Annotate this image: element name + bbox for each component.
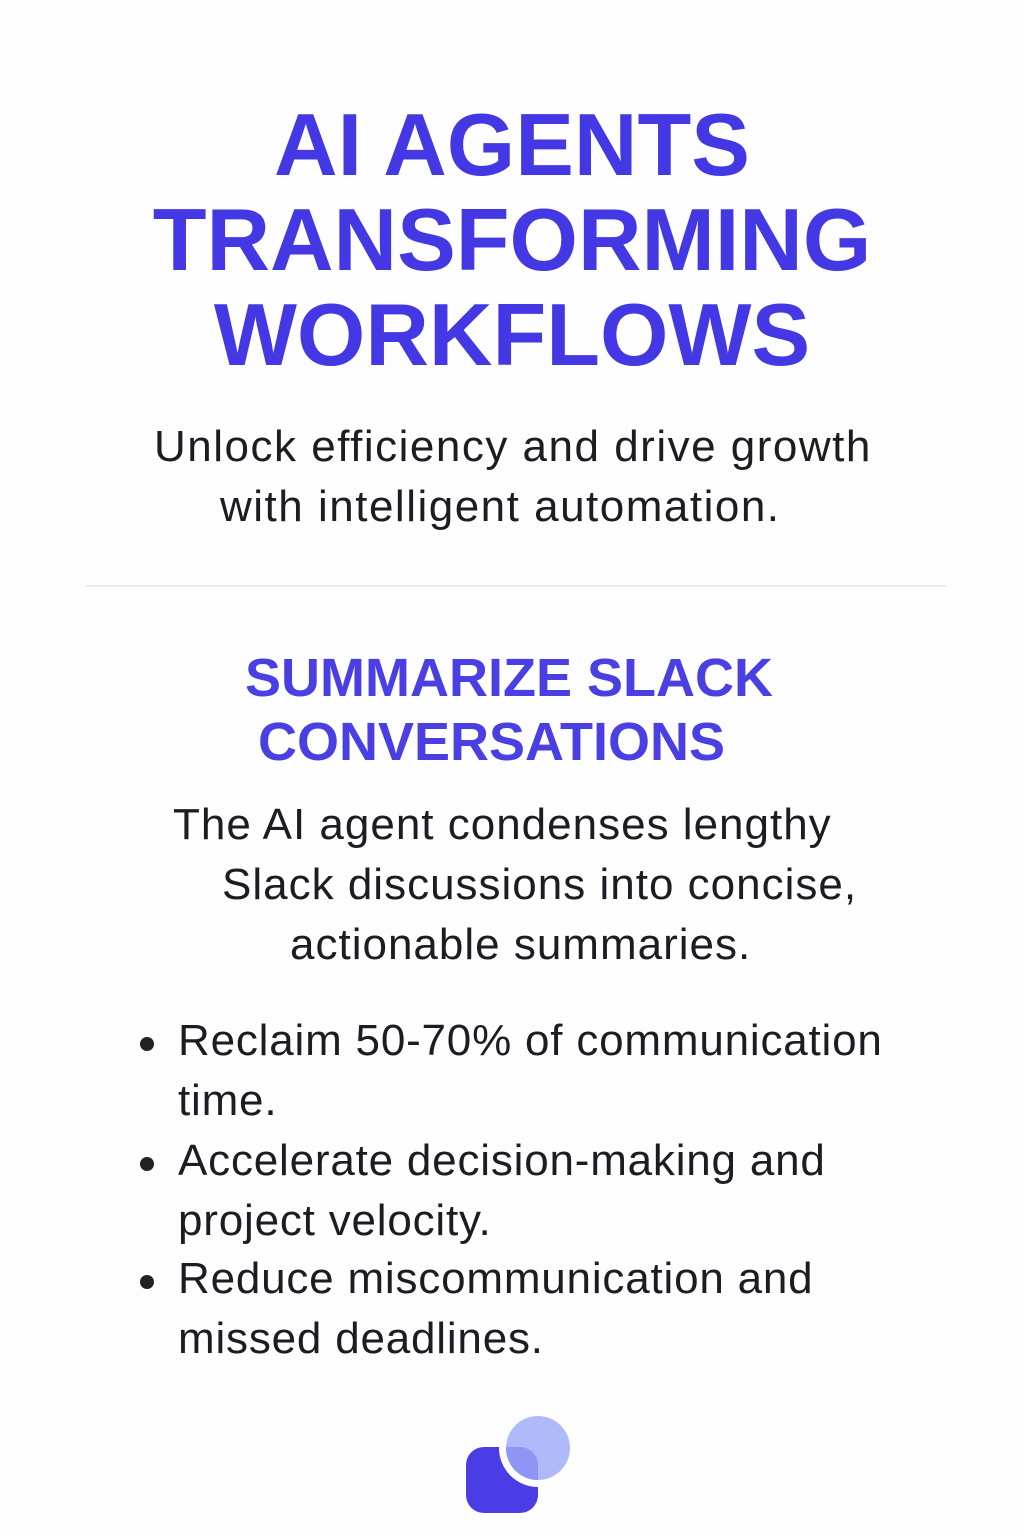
bullet 2: Accelerate decision-making and: [178, 1136, 826, 1185]
bullet 3: Reduce miscommunication and: [178, 1254, 813, 1303]
section heading: CONVERSATIONS: [258, 712, 725, 772]
title: TRANSFORMING: [153, 190, 871, 289]
bullet 2: project velocity.: [178, 1196, 492, 1245]
bullet 1: Reclaim 50-70% of communication: [178, 1016, 883, 1065]
description: The AI agent condenses lengthy: [173, 800, 832, 849]
bullet 1: time.: [178, 1076, 277, 1125]
section heading: SUMMARIZE SLACK: [245, 648, 773, 708]
bullet 3: [140, 1254, 813, 1363]
subtitle: [154, 422, 872, 531]
subtitle: Unlock efficiency and drive growth: [154, 422, 872, 471]
bullet 2: [140, 1136, 826, 1245]
bullet 1: [140, 1016, 883, 1125]
icon: logo: [466, 1416, 570, 1513]
subtitle: with intelligent automation.: [220, 482, 781, 531]
description: Slack discussions into concise,: [222, 860, 857, 909]
title: WORKFLOWS: [214, 285, 810, 384]
description: actionable summaries.: [290, 920, 751, 969]
title: AI AGENTS: [274, 95, 750, 194]
bullet list: [140, 1016, 883, 1363]
bullet 3: missed deadlines.: [178, 1314, 544, 1363]
title: [153, 95, 871, 384]
section heading: [245, 648, 773, 772]
description: [173, 800, 857, 969]
